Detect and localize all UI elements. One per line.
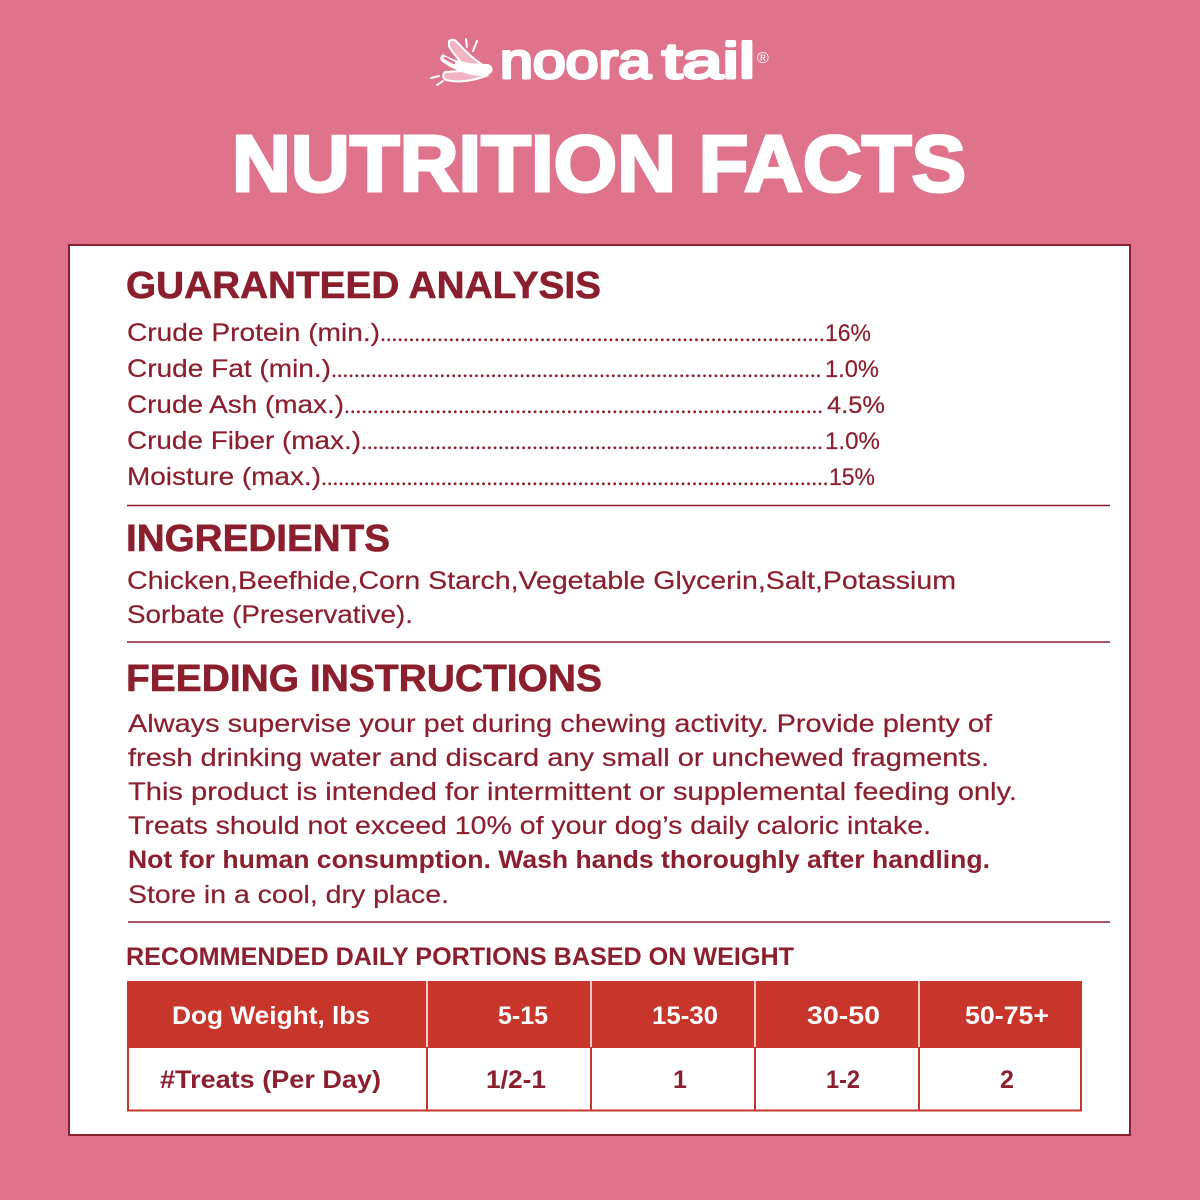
row: crude ash: 4.5% [827, 392, 885, 419]
feeding instructions text [128, 710, 1017, 909]
brand logo [431, 33, 769, 89]
feeding instructions text: This product is intended for intermittent or supplemental feeding only. [128, 778, 1017, 806]
table header row: 15-30 [652, 1002, 718, 1030]
table header row: 5-15 [498, 1002, 548, 1030]
table body row: 2 [1000, 1066, 1014, 1094]
row: crude fat [127, 355, 879, 383]
wordmark: noora [500, 33, 651, 89]
heading: ingredients: INGREDIENTS [126, 518, 390, 560]
ingredients text [127, 567, 956, 629]
row: moisture [127, 463, 875, 491]
table body row [128, 1047, 1081, 1110]
table body row: 1-2 [826, 1066, 860, 1094]
row: crude fiber: Crude Fiber (max.) [127, 427, 361, 455]
row: crude fat: 1.0% [825, 356, 879, 383]
row: moisture: Moisture (max.) [127, 463, 321, 491]
table: daily portions [127, 981, 1082, 1110]
title: NUTRITION FACTS [232, 119, 966, 208]
feeding instructions text: Treats should not exceed 10% of your dog’s daily caloric intake. [128, 812, 931, 840]
row: crude fiber: 1.0% [825, 428, 880, 455]
icon: wagging tail [431, 39, 492, 85]
section: guaranteed analysis [126, 265, 885, 491]
table header row: 50-75+ [965, 1002, 1049, 1030]
table header row: Dog Weight, lbs [172, 1002, 370, 1030]
row: crude fat: Crude Fat (min.) [127, 355, 331, 383]
feeding instructions text: fresh drinking water and discard any small or unchewed fragments. [128, 744, 989, 772]
heading: feeding instructions: FEEDING INSTRUCTIONS [126, 658, 602, 700]
wordmark: tail [662, 33, 755, 89]
table header row [127, 981, 1082, 1047]
row: moisture: 15% [829, 464, 875, 491]
row: crude protein: Crude Protein (min.) [127, 319, 380, 347]
feeding instructions text: Store in a cool, dry place. [128, 881, 449, 909]
row: crude protein: 16% [825, 320, 871, 347]
feeding instructions text: Always supervise your pet during chewing activity. Provide plenty of [128, 710, 992, 738]
feeding instructions text: Not for human consumption. Wash hands thoroughly after handling. [128, 846, 990, 874]
table body row: 1 [673, 1066, 687, 1094]
registered mark: ® [757, 50, 769, 67]
wordmark [500, 33, 755, 89]
heading: guaranteed analysis: GUARANTEED ANALYSIS [126, 265, 601, 307]
section: ingredients [126, 518, 956, 629]
section: feeding instructions [126, 658, 1017, 909]
table header row: 30-50 [807, 1002, 880, 1030]
ingredients text: Sorbate (Preservative). [127, 601, 413, 629]
row: crude fiber [127, 427, 880, 455]
panel: nutrition card [69, 245, 1130, 1135]
row: crude protein [127, 319, 871, 347]
ingredients text: Chicken,Beefhide,Corn Starch,Vegetable Glycerin,Salt,Potassium [127, 567, 956, 595]
table body row: 1/2-1 [486, 1066, 546, 1094]
heading: daily portions: RECOMMENDED DAILY PORTIONS BASED ON WEIGHT [126, 943, 794, 971]
row: crude ash [127, 391, 885, 419]
row: crude ash: Crude Ash (max.) [127, 391, 344, 419]
table body row: #Treats (Per Day) [160, 1066, 381, 1094]
